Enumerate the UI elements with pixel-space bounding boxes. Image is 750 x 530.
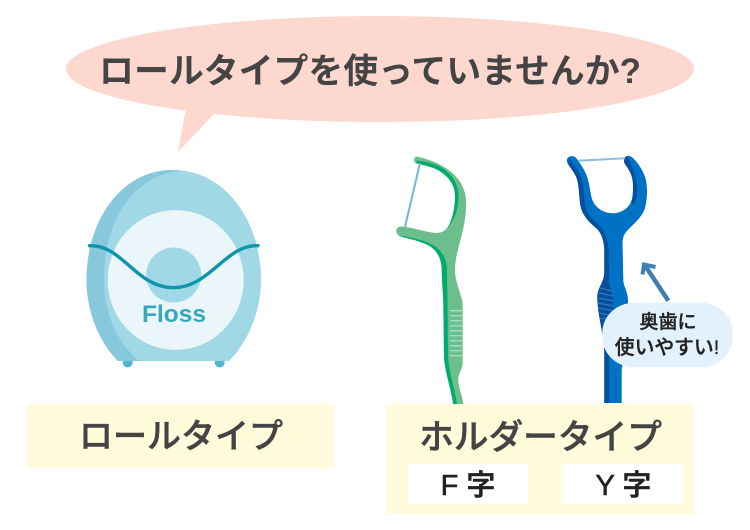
title: ロールタイプを使っていませんか? <box>99 52 641 91</box>
label panel: holder type <box>386 404 694 514</box>
icon: roll type floss dispenser <box>86 170 261 368</box>
callout: easy to use on back teeth: 奥歯に <box>639 311 697 333</box>
label: Y shape <box>563 464 684 504</box>
label panel: roll type <box>27 404 334 468</box>
label: F shape <box>408 464 528 504</box>
label: F shape: F 字 <box>441 469 495 502</box>
floss thread <box>405 163 420 227</box>
label: Floss: Floss <box>142 301 206 328</box>
arrow <box>642 264 668 301</box>
callout: easy to use on back teeth: 使いやすい! <box>615 337 719 359</box>
icon: F-shaped green floss holder <box>396 156 466 404</box>
label: Y shape: Y 字 <box>596 469 651 502</box>
floss thread <box>578 158 625 161</box>
label panel: roll type: ロールタイプ <box>79 418 283 456</box>
label panel: holder type: ホルダータイプ <box>419 418 662 457</box>
icon: Y-shaped blue floss holder <box>567 156 647 403</box>
speech bubble with title <box>66 16 694 152</box>
callout: easy to use on back teeth <box>602 264 733 367</box>
grip with stripes <box>597 273 614 353</box>
